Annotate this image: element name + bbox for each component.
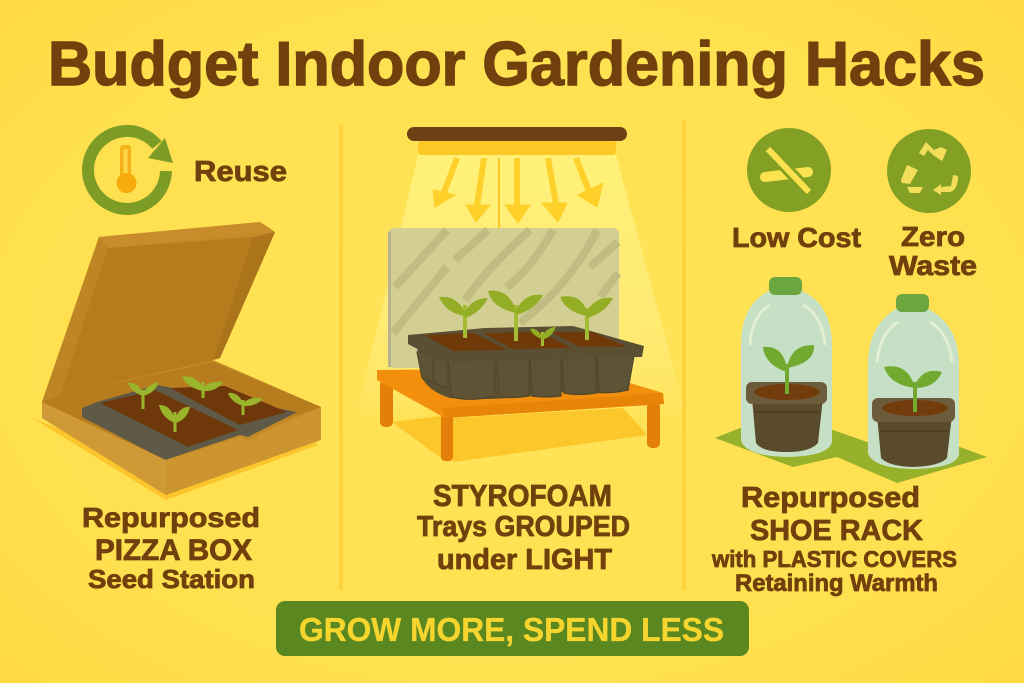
label: Zero Waste: Waste [889, 250, 977, 281]
panel: pizza box [32, 131, 321, 594]
seedlings [439, 291, 613, 346]
column dividers [339, 120, 686, 590]
styrofoam board [388, 228, 619, 368]
banner [276, 601, 749, 656]
label: Zero Waste: Zero [901, 221, 965, 252]
caption: shoe rack: with PLASTIC COVERS [711, 546, 957, 572]
label: Low Cost: Low Cost [732, 222, 861, 253]
label: Reuse: Reuse [194, 156, 287, 188]
panel: styrofoam trays [358, 127, 685, 576]
caption: shoe rack [711, 482, 957, 597]
caption: shoe rack: Retaining Warmth [735, 570, 938, 597]
seedling tray [82, 385, 297, 460]
illustration: grow light beam [358, 127, 685, 410]
title: Budget Indoor Gardening Hacks [48, 30, 985, 99]
caption: styrofoam trays: STYROFOAM [433, 478, 612, 513]
caption: styrofoam trays: Trays GROUPED [417, 511, 630, 543]
light arrows [433, 158, 603, 228]
seedling tray [408, 326, 644, 399]
table [377, 368, 664, 462]
icon: low cost [747, 128, 831, 212]
caption: pizza box: PIZZA BOX [95, 534, 252, 567]
caption: styrofoam trays: under LIGHT [437, 544, 612, 576]
caption: shoe rack: SHOE RACK [750, 515, 923, 547]
caption: styrofoam trays [417, 478, 630, 576]
bottle cover right [868, 294, 959, 469]
banner text: GROW MORE, SPEND LESS [299, 611, 724, 648]
caption: pizza box [82, 502, 260, 594]
bottle cover left [741, 277, 832, 457]
panel: shoe rack with plastic covers [711, 128, 987, 597]
caption: pizza box: Seed Station [88, 564, 255, 594]
caption: shoe rack: Repurposed [741, 482, 920, 514]
label: Zero Waste [889, 221, 977, 281]
seedlings [128, 376, 263, 432]
rack mat [715, 428, 987, 483]
illustration: open pizza box [32, 222, 321, 500]
caption: pizza box: Repurposed [82, 502, 260, 533]
icon: zero waste recycle [887, 129, 971, 213]
icon: reuse cycle with thermometer [88, 131, 173, 209]
